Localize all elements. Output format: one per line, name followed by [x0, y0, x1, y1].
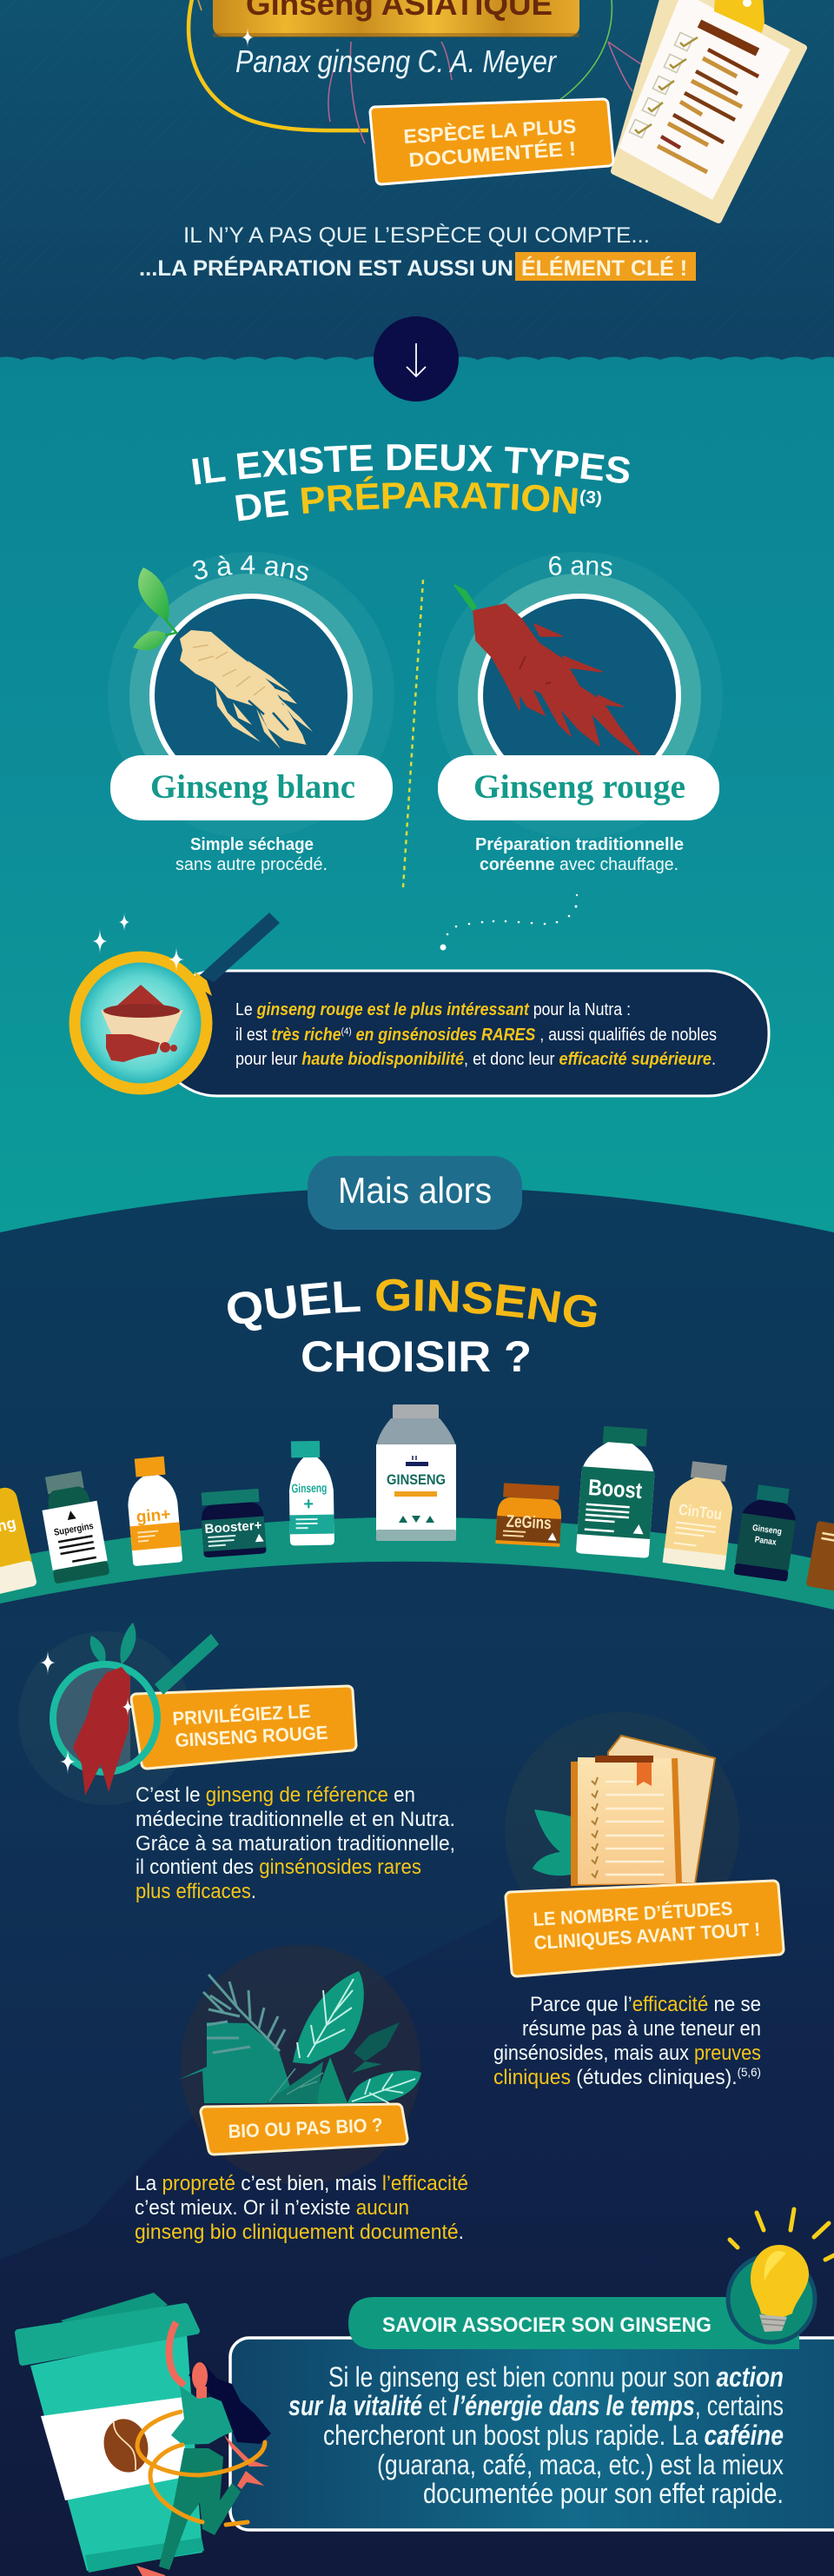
description	[475, 835, 684, 874]
tag: espèce la plus documentée: DOCUMENTÉE !	[407, 136, 577, 171]
tag: espèce la plus documentée: ESPÈCE LA PLUS	[403, 114, 577, 148]
callout text: (4)	[341, 1026, 352, 1037]
bottle: Ginseng Panax	[733, 1483, 800, 1582]
icon: green leaves	[133, 568, 176, 650]
description: Préparation traditionnelle	[475, 835, 684, 854]
heading: deux types de préparation	[192, 444, 630, 521]
tag: GINSENG ROUGE	[175, 1722, 328, 1751]
intro text	[139, 222, 696, 281]
icon: magnifier with red powder bowl	[75, 913, 280, 1089]
background: navy dome section	[0, 1187, 834, 2576]
description: Simple séchage	[190, 835, 314, 854]
bottle: main GINSENG	[376, 1404, 456, 1541]
panel text: documentée pour son effet rapide.	[423, 2478, 784, 2509]
panel: savoir associer son ginseng: SAVOIR ASSOCIER SON GINSENG	[382, 2314, 712, 2337]
description	[175, 835, 328, 874]
bottle: CinTou	[663, 1459, 738, 1570]
body text: C’est le ginseng de référence en	[136, 1783, 415, 1807]
bottle: yellow, left edge	[0, 1485, 37, 1596]
bottle: brown, right edge	[806, 1521, 834, 1593]
bottle: Supergins: Supergins	[53, 1521, 95, 1538]
callout text	[235, 1000, 717, 1069]
divider: dotted line	[403, 580, 423, 887]
bottle: CinTou: CinTou	[678, 1501, 723, 1524]
icon: coffee cup	[18, 2293, 204, 2573]
halo	[18, 1631, 192, 1805]
bottle: ZeGins: ZeGins	[506, 1512, 552, 1533]
body text	[135, 2172, 468, 2244]
root lines behind banner	[189, 0, 643, 143]
heading: quel ginseng choisir: QUEL GINSENG	[228, 1279, 597, 1331]
dotted trail	[440, 894, 578, 951]
body text: médecine traditionnelle et en Nutra.	[136, 1808, 455, 1831]
tag: espèce la plus documentée	[375, 104, 608, 179]
bottle: gin+: gin+	[136, 1505, 171, 1527]
bottle: Supergins	[36, 1469, 109, 1584]
icon: documents and leaves	[505, 1712, 739, 1947]
panel: ginseng blanc	[108, 552, 394, 874]
icon: woman with hula hoop	[136, 2322, 271, 2576]
tag	[206, 2109, 402, 2149]
body text: Grâce à sa maturation traditionnelle,	[136, 1832, 455, 1856]
description: coréenne avec chauffage.	[480, 855, 678, 874]
bottle: Booster+	[200, 1489, 267, 1557]
callout text: pour leur haute biodisponibilité, et donc leur efficacité supérieure.	[235, 1050, 716, 1069]
heading: quel ginseng choisir	[228, 1279, 597, 1381]
bottle: Ginseng +: Ginseng	[291, 1481, 327, 1495]
body text: cliniques (études cliniques).	[493, 2066, 745, 2089]
tag: CLINIQUES AVANT TOUT !	[533, 1918, 761, 1954]
body text: il contient des ginsénosides rares	[136, 1856, 421, 1879]
arrow circle	[374, 316, 459, 402]
bottle: Boost	[576, 1424, 658, 1558]
shelf arc	[0, 1517, 834, 1610]
tip 3: bio ou pas bio	[135, 1945, 468, 2244]
panel text: Si le ginseng est bien connu pour son action	[328, 2361, 784, 2393]
icon: tropical leaves	[178, 1945, 421, 2185]
body text: (5,6)	[738, 2065, 761, 2079]
panel text: sur la vitalité et l’énergie dans le temps, certains	[288, 2390, 784, 2421]
tag: BIO OU PAS BIO ?	[228, 2114, 383, 2142]
intro text: ...LA PRÉPARATION EST AUSSI UN	[139, 256, 513, 281]
bottle: main GINSENG: GINSENG	[387, 1471, 446, 1488]
name: Ginseng rouge	[473, 768, 685, 806]
body text: résume pas à une teneur en	[522, 2017, 761, 2041]
heading: quel ginseng choisir: CHOISIR ?	[301, 1332, 532, 1381]
bottle: gin+	[124, 1456, 182, 1566]
circle halo	[436, 552, 723, 839]
gold banner: Ginseng asiatique	[213, 0, 579, 48]
heading: deux types de préparation: IL EXISTE DEUX TYPES	[192, 444, 630, 485]
tag: LE NOMBRE D’ÉTUDES	[533, 1897, 733, 1930]
body text: ginseng bio cliniquement documenté.	[135, 2221, 464, 2244]
body text	[136, 1783, 455, 1903]
name: Ginseng blanc	[150, 768, 355, 806]
header pill	[348, 2297, 799, 2349]
tip 2: nombre d'études cliniques	[493, 1712, 778, 2089]
body text: ginsénosides, mais aux preuves	[493, 2042, 761, 2065]
icon: white ginseng root	[180, 630, 313, 749]
name pill	[438, 755, 719, 820]
heading: deux types de préparation: DE PRÉPARATION	[235, 476, 578, 521]
bottle: Ginseng Panax: Ginseng	[751, 1524, 783, 1537]
icon: red ginseng root	[454, 585, 641, 756]
callout text: en ginsénosides RARES , aussi qualifiés de nobles	[356, 1026, 739, 1045]
bottle: Ginseng Panax: Panax	[754, 1535, 778, 1548]
pill: mais alors	[308, 1156, 522, 1230]
body text	[493, 1993, 761, 2089]
bottle: Boost: Boost	[587, 1474, 643, 1504]
name pill	[110, 755, 393, 820]
pill: mais alors: Mais alors	[338, 1170, 492, 1211]
icon: teal magnifier with red root	[40, 1623, 219, 1796]
body text: La propreté c’est bien, mais l’efficacité	[135, 2172, 468, 2195]
tag	[511, 1886, 778, 1971]
panel text: chercheront un boost plus rapide. La caféine	[323, 2420, 784, 2451]
species name: Panax ginseng C. A. Meyer	[235, 43, 558, 79]
circle halo	[108, 552, 394, 839]
tip 1: privilégiez le ginseng rouge	[18, 1623, 455, 1903]
icon: clipboard	[614, 0, 804, 220]
icon: light bulb	[728, 2209, 834, 2342]
age label: 6 ans	[549, 556, 612, 576]
callout text: il est très riche	[235, 1026, 350, 1045]
bottle: Ginseng +	[288, 1441, 334, 1545]
callout: ginseng rouge panel	[156, 971, 769, 1096]
description: sans autre procédé.	[175, 855, 328, 874]
background: top section	[0, 0, 834, 365]
age label: 3 à 4 ans	[193, 555, 308, 581]
body text: Parce que l’efficacité ne se	[530, 1993, 761, 2016]
bottles row	[0, 1404, 834, 1596]
callout text: Le ginseng rouge est le plus intéressant pour la Nutra :	[235, 1000, 631, 1019]
body text: c’est mieux. Or il n’existe aucun	[135, 2196, 409, 2220]
bottle: Ginseng +: +	[303, 1495, 314, 1514]
bottle: ZeGins	[495, 1483, 563, 1547]
tag: PRIVILÉGIEZ LE	[172, 1700, 311, 1730]
bottle: Booster+: Booster+	[204, 1518, 262, 1537]
panel text	[288, 2361, 784, 2509]
body text: plus efficaces.	[136, 1880, 256, 1903]
panel: savoir associer son ginseng	[230, 2297, 834, 2530]
intro text: IL N’Y A PAS QUE L’ESPÈCE QUI COMPTE...	[183, 222, 650, 248]
background: teal section with wavy top	[0, 356, 834, 1251]
heading: deux types de préparation: (3)	[580, 490, 601, 508]
tag	[136, 1691, 351, 1763]
intro text: ÉLÉMENT CLÉ !	[521, 256, 687, 281]
panel: ginseng rouge	[436, 552, 723, 874]
